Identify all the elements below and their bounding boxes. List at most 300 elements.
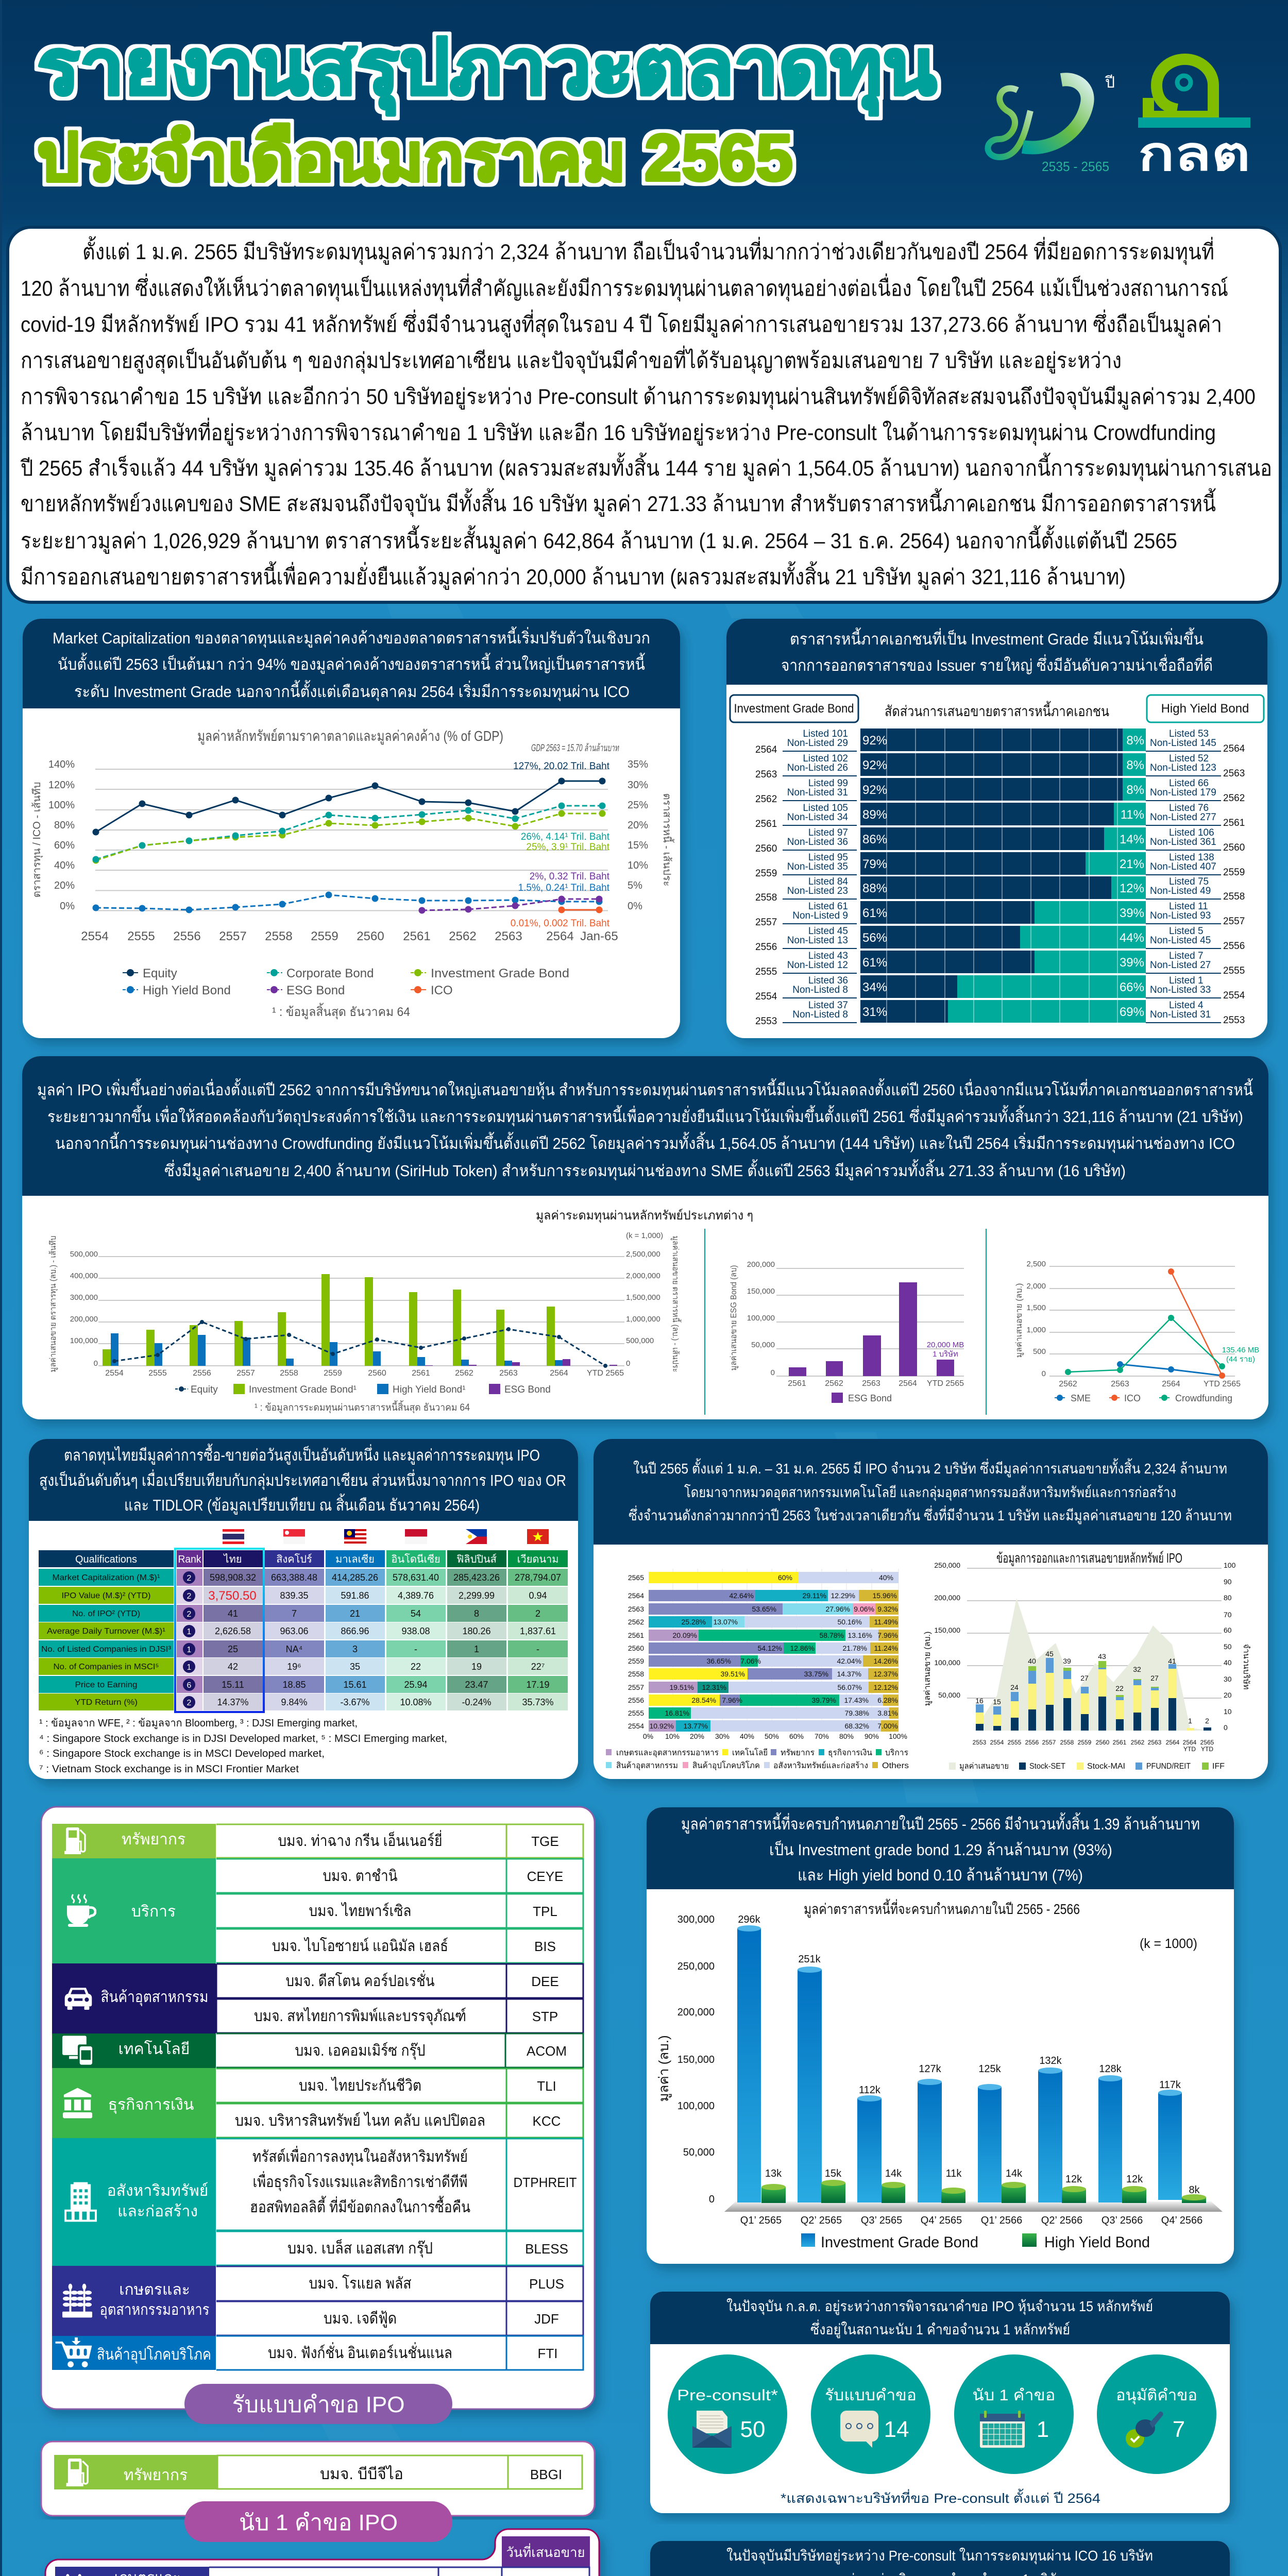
- legend: ICO: [431, 984, 453, 997]
- footnotes: ⁴ : Singapore Stock exchange is in DJSI Developed market, ⁵ : MSCI Emerging market,: [39, 1733, 447, 1744]
- stacked share bars: 56%: [862, 931, 887, 945]
- company names: บมจ. ไทยพาร์เซิล: [309, 1902, 411, 1920]
- combo chart: IPO count and value: 80: [1224, 1594, 1232, 1602]
- panel: private bond issuance split: [726, 619, 1267, 1038]
- line chart: % of GDP: 2557: [219, 929, 247, 943]
- stacked bar chart: IPO by industry: 39.51%: [721, 1670, 745, 1678]
- panel: IPO issuance: [594, 1439, 1268, 1779]
- category column: [52, 1824, 216, 2370]
- line chart: SME, ICO, crowdfunding: Crowdfunding: [1175, 1393, 1232, 1403]
- combo chart: IPO count and value: 10: [1224, 1707, 1232, 1716]
- IPO legend: PFUND/REIT: [1146, 1762, 1191, 1771]
- bar chart legend: ESG Bond: [504, 1384, 551, 1395]
- ASEAN table rows: IPO Value (M.$)² (YTD): [62, 1591, 150, 1600]
- combo chart: IPO count and value: 40: [1224, 1658, 1232, 1667]
- combo chart: IPO count and value: 27: [1150, 1674, 1159, 1682]
- ASEAN table rows: 54: [411, 1608, 421, 1619]
- maturity legend: [801, 2233, 1150, 2251]
- stacked share bars: 2559: [755, 868, 777, 879]
- bar chart: ESG bond: 2561: [788, 1379, 806, 1388]
- combo chart: IPO count and value: 32: [1133, 1665, 1141, 1673]
- bar chart: maturing bonds: 12k: [1126, 2174, 1143, 2185]
- combo chart: IPO count and value: 200,000: [934, 1594, 960, 1602]
- legend box: investment grade: Investment Grade Bond: [734, 702, 854, 716]
- stacked share bars: Listed 95: [808, 852, 848, 863]
- stacked share bars: 61%: [862, 906, 887, 920]
- stacked bar chart: IPO by industry: 53.65%: [752, 1605, 776, 1613]
- stacked share bars: 39%: [1120, 956, 1144, 970]
- stacked share bars: 8%: [1126, 734, 1144, 748]
- combo chart: IPO count and value: 100,000: [934, 1658, 960, 1667]
- line chart: % of GDP: 80%: [54, 820, 75, 831]
- line chart: % of GDP: 40%: [54, 860, 75, 871]
- stacked bar chart: IPO by industry: 11.24%: [874, 1644, 898, 1652]
- combo chart: IPO count and value: 2564: [1183, 1739, 1197, 1746]
- ASEAN table rows: 2: [187, 1574, 192, 1583]
- panel header: เป็น Investment grade bond 1.29 ล้านล้านบาท (93%): [769, 1840, 1112, 1859]
- stacked share bars: 2556: [755, 942, 777, 953]
- panel header: มูลค่าตราสารหนี้ที่จะครบกำหนดภายในปี 2565 - 2566 มีจำนวนทั้งสิ้น 1.39 ล้านล้านบาท: [681, 1812, 1200, 1834]
- stacked share bars: 2553: [755, 1016, 777, 1027]
- ASEAN table rows: 23.47: [465, 1680, 488, 1690]
- stacked bar chart: IPO by industry: 28.54%: [692, 1696, 716, 1704]
- bar chart: maturing bonds: 127k: [919, 2063, 942, 2075]
- line chart: % of GDP: 120%: [48, 779, 75, 791]
- panel header: [594, 1439, 1268, 1545]
- bar chart: equity and bonds: 2555: [148, 1369, 167, 1378]
- combo chart: IPO count and value: 2562: [1131, 1739, 1145, 1746]
- stacked bar chart: IPO by industry: 9.32%: [877, 1605, 898, 1613]
- industry legend: สินค้าอุตสาหกรรม: [616, 1761, 678, 1771]
- stacked bar chart: IPO by industry: 0%: [643, 1732, 653, 1740]
- bar chart: equity and bonds: 2559: [324, 1369, 342, 1378]
- category column: ธุรกิจการเงิน: [108, 2096, 194, 2114]
- stacked share bars: 2556: [1223, 941, 1245, 952]
- combo chart: IPO count and value: 50: [1224, 1642, 1232, 1651]
- stacked share bars: 66%: [1120, 980, 1144, 994]
- stacked bar chart: IPO by industry: 7.96%: [722, 1696, 742, 1704]
- stacked share bars: Listed 1: [1169, 975, 1204, 986]
- combo chart: IPO count and value: มูลค่าเสนอขาย (ลบ.): [923, 1632, 933, 1706]
- bar chart: ESG bond: 150,000: [747, 1287, 775, 1296]
- combo chart: IPO count and value: จำนวนบริษัท: [1242, 1643, 1250, 1690]
- bar chart: maturing bonds: 0: [709, 2194, 715, 2205]
- stacked bar chart: IPO by industry: 9.06%: [854, 1605, 874, 1613]
- stacked share bars: Listed 105: [803, 803, 848, 814]
- ASEAN table rows: -: [536, 1644, 539, 1654]
- line chart: % of GDP: 2560: [357, 929, 384, 943]
- stacked share bars: Non-Listed 277: [1150, 812, 1216, 823]
- combo chart: IPO count and value: 0: [1224, 1723, 1228, 1732]
- company names: บมจ. ตาชำนิ: [323, 1868, 398, 1885]
- tickers: ACOM: [527, 2043, 567, 2059]
- industry legend: เทคโนโลยี: [732, 1748, 768, 1757]
- stacked bar chart: IPO by industry: 29.11%: [803, 1591, 826, 1600]
- stat: received: รับแบบคำขอ: [825, 2387, 917, 2404]
- stacked bar chart: IPO by industry: 68.32%: [845, 1722, 869, 1730]
- combo chart: IPO count and value: 39: [1063, 1657, 1071, 1665]
- stacked share bars: 86%: [862, 833, 887, 846]
- pill: one filing returned: [184, 2501, 452, 2542]
- stacked share bars: 2561: [1223, 818, 1245, 828]
- company names: บมจ. เอคอมเมิร์ซ กรุ๊ป: [295, 2042, 426, 2060]
- stat: pre-consult: [668, 2354, 787, 2474]
- bar chart: maturing bonds: Q4’ 2565: [921, 2215, 962, 2226]
- bar chart: ESG bond: 0: [771, 1368, 775, 1377]
- bar chart: maturing bonds: 251k: [798, 1954, 821, 1965]
- stacked share bars: Non-Listed 93: [1150, 910, 1211, 921]
- combo chart: IPO count and value: ข้อมูลการออกและการเสนอขายหลักทรัพย์ IPO: [996, 1550, 1182, 1566]
- ASEAN table rows: No. of Listed Companies in DJSI³: [41, 1645, 172, 1654]
- stacked bar chart: IPO by industry: 2554: [628, 1722, 644, 1730]
- industry legend: [606, 1748, 909, 1771]
- ASEAN table rows: YTD Return (%): [75, 1698, 138, 1707]
- stacked share bars: 2554: [755, 991, 777, 1002]
- stacked share bars: 31%: [862, 1005, 887, 1019]
- ASEAN table rows: 663,388.48: [271, 1572, 317, 1583]
- stacked bar chart: IPO by industry: 60%: [778, 1573, 792, 1582]
- stacked share bars: 79%: [862, 857, 887, 871]
- panel header: ในปัจจุบันมีบริษัทอยู่ระหว่าง Pre-consult ในการระดมทุนผ่าน ICO 16 บริษัท: [726, 2547, 1153, 2565]
- stat: approved: อนุมัติคำขอ: [1116, 2387, 1197, 2405]
- stacked bar chart: IPO by industry: 12.29%: [831, 1591, 855, 1600]
- ASEAN table rows: 2: [187, 1610, 192, 1619]
- combo chart: IPO count and value: 2561: [1113, 1739, 1127, 1746]
- stacked share bars: Non-Listed 31: [787, 787, 848, 798]
- stat: pre-consult: 50: [740, 2417, 765, 2442]
- stacked share bars: Non-Listed 26: [787, 762, 848, 773]
- tickers: DTPHREIT: [513, 2175, 577, 2190]
- ASEAN table header: มาเลเซีย: [335, 1554, 375, 1565]
- company names: บมจ. โรแยล พลัส: [309, 2274, 411, 2292]
- bar chart: maturing bonds: 13k: [765, 2168, 782, 2179]
- stacked share bars: Listed 138: [1169, 852, 1214, 863]
- stacked bar chart: IPO by industry: 7.06%: [740, 1657, 761, 1665]
- stacked share bars: Non-Listed 49: [1150, 886, 1211, 896]
- tickers: KCC: [533, 2113, 561, 2129]
- bar chart: maturing bonds: 8k: [1189, 2184, 1200, 2196]
- bar chart: ESG bond: 20,000 MB: [927, 1341, 964, 1349]
- line chart: % of GDP: 2563: [495, 929, 522, 943]
- stacked share bars: Listed 101: [803, 728, 848, 739]
- stacked share bars: Non-Listed 13: [787, 935, 848, 946]
- ASEAN table rows: 3: [352, 1644, 358, 1654]
- stacked share bars: Non-Listed 407: [1150, 861, 1216, 872]
- ASEAN table rows: 2: [535, 1608, 540, 1619]
- stacked share bars: 2559: [1223, 867, 1245, 878]
- ASEAN table rows: 18.85: [282, 1680, 306, 1690]
- category column: เทคโนโลยี: [118, 2040, 190, 2058]
- bar chart: equity and bonds: 2561: [412, 1369, 430, 1378]
- stacked bar chart: IPO by industry: 39.79%: [812, 1696, 836, 1704]
- line chart: % of GDP: GDP 2563 = 15.70 ล้านล้านบาท: [531, 743, 619, 754]
- stacked bar chart: IPO by industry: 11.49%: [874, 1618, 898, 1626]
- ASEAN table rows: 285,423.26: [453, 1572, 500, 1583]
- stacked share bars: Non-Listed 34: [787, 812, 848, 823]
- ASEAN table rows: -0.24%: [462, 1697, 492, 1707]
- stacked bar chart: IPO by industry: 33.75%: [804, 1670, 828, 1678]
- ASEAN table rows: 7: [292, 1608, 297, 1619]
- line chart: SME, ICO, crowdfunding: ICO: [1124, 1393, 1141, 1403]
- stacked bar chart: IPO by industry: 7.00%: [877, 1722, 898, 1730]
- company names: บมจ. ไบโอซายน์ แอนิมัล เฮลธ์: [272, 1937, 448, 1955]
- combo chart: IPO count and value: 2564: [1166, 1739, 1180, 1746]
- bar chart: maturing bonds: 50,000: [683, 2147, 715, 2158]
- ASEAN table rows: 180.26: [462, 1626, 491, 1636]
- stacked bar chart: IPO by industry: 60%: [789, 1732, 804, 1740]
- ASEAN table rows: 22: [411, 1662, 421, 1672]
- combo chart: IPO count and value: 45: [1045, 1650, 1054, 1658]
- combo chart: IPO count and value: 150,000: [934, 1626, 960, 1634]
- stacked share bars: 92%: [862, 783, 887, 797]
- panel header: ซึ่งอยู่ในสถานะนับ 1 คำขอจำนวน 1 หลักทรัพย์: [810, 2319, 1070, 2338]
- legend box: investment grade: [730, 695, 858, 722]
- ASEAN table rows: 2,626.58: [215, 1626, 251, 1636]
- tickers: TLI: [537, 2078, 556, 2094]
- ASEAN table rows: 8: [474, 1608, 479, 1619]
- ASEAN table rows: 866.96: [341, 1626, 369, 1636]
- stacked bar chart: IPO by industry: 70%: [815, 1732, 829, 1740]
- stacked bar chart: IPO by industry: 2560: [628, 1644, 644, 1652]
- legend: Investment Grade Bond: [431, 967, 569, 980]
- ASEAN table rows: 2,299.99: [459, 1590, 495, 1601]
- stacked bar chart: IPO by industry: 50.16%: [838, 1618, 862, 1626]
- legend: Corporate Bond: [286, 967, 374, 980]
- line chart: % of GDP: 30%: [628, 779, 648, 791]
- company names: บมจ. ไทยประกันชีวิต: [299, 2076, 421, 2094]
- IPO legend: IFF: [1212, 1762, 1225, 1771]
- bar chart: equity and bonds: 300,000: [70, 1293, 98, 1302]
- bar chart: maturing bonds: 300,000: [677, 1914, 715, 1925]
- stacked share bars: 89%: [862, 808, 887, 822]
- note: *แสดงเฉพาะบริษัทที่ขอ Pre-consult ตั้งแต่ ปี 2564: [781, 2488, 1100, 2506]
- combo chart: IPO count and value: 2558: [1060, 1739, 1074, 1746]
- company names: ทรัสต์เพื่อการลงทุนในอสังหาริมทรัพย์: [252, 2146, 468, 2166]
- stacked share bars: Listed 43: [808, 951, 848, 961]
- tickers: PLUS: [529, 2276, 564, 2292]
- bar chart: equity and bonds: มูลค่าเสนอขาย ตราสารทุน (ลบ.) - เส้นทึบ: [48, 1235, 58, 1372]
- ASEAN table rows: -3.67%: [340, 1697, 370, 1707]
- ASEAN table header: เวียดนาม: [517, 1554, 558, 1565]
- company names: [235, 1830, 485, 2362]
- line chart: % of GDP: 10%: [628, 860, 648, 871]
- line chart: SME, ICO, crowdfunding: 2,000: [1026, 1282, 1046, 1291]
- stacked bar chart: IPO by industry: 2562: [628, 1618, 644, 1626]
- tickers: FTI: [538, 2346, 557, 2361]
- logo: 30 years: ปี: [1105, 74, 1115, 91]
- stacked share bars: 2558: [755, 892, 777, 903]
- bar chart: equity and bonds: 2,500,000: [626, 1250, 660, 1259]
- stacked share bars: Non-Listed 23: [787, 886, 848, 896]
- stacked share bars: 8%: [1126, 758, 1144, 772]
- legend: [123, 967, 569, 1020]
- ASEAN table rows: 9.84%: [281, 1697, 308, 1707]
- stacked share bars: 88%: [862, 882, 887, 895]
- stacked bar chart: IPO by industry: 25.28%: [682, 1618, 706, 1626]
- combo chart: IPO count and value: 15: [993, 1698, 1001, 1706]
- logo: SEC: กลต: [1138, 128, 1250, 180]
- stacked bar chart: IPO by industry: 10.92%: [650, 1722, 674, 1730]
- panel: ICO pipeline: [650, 2541, 1230, 2576]
- stacked bar chart: IPO by industry: 2565: [628, 1573, 644, 1582]
- bar chart: maturing bonds: (k = 1000): [1140, 1936, 1197, 1951]
- pill: one filing returned: นับ 1 คำขอ IPO: [239, 2510, 398, 2535]
- bar chart: ESG bond: 50,000: [751, 1341, 775, 1349]
- ASEAN table rows: 591.86: [341, 1590, 369, 1601]
- legend: ¹ : ข้อมูลสิ้นสุด ธันวาคม 64: [272, 1003, 410, 1020]
- stacked bar chart: IPO by industry: 13.07%: [714, 1618, 738, 1626]
- combo chart: IPO count and value: 100: [1224, 1561, 1236, 1569]
- company names: ฮอสพิทอลลิตี้ ที่มีข้อตกลงในการซื้อคืน: [250, 2196, 470, 2216]
- ASEAN table header: Rank: [178, 1554, 201, 1565]
- logo: 30 years: [988, 74, 1115, 174]
- bar chart: maturing bonds: 14k: [885, 2168, 902, 2179]
- ASEAN table header: ไทย: [223, 1553, 242, 1565]
- panel header: จากการออกตราสารของ Issuer รายใหญ่ ซึ่งมีอันดับความน่าเชื่อถือที่ดี: [781, 654, 1213, 674]
- bar chart: equity and bonds: [48, 1231, 682, 1414]
- stacked bar chart: IPO by industry: 42.64%: [730, 1591, 754, 1600]
- stacked bar chart: IPO by industry: 79.38%: [845, 1709, 869, 1717]
- bar chart: maturing bonds: Q4’ 2566: [1161, 2215, 1202, 2226]
- chart heading: สัดส่วนการเสนอขายตราสารหนี้ภาคเอกชน: [885, 701, 1109, 719]
- footnotes: ¹ : ข้อมูลจาก WFE, ² : ข้อมูลจาก Bloomberg, ³ : DJSI Emerging market,: [39, 1718, 358, 1730]
- category column: สินค้าอุตสาหกรรม: [101, 1989, 208, 2007]
- panel: approved IPO filings: [45, 2529, 599, 2576]
- line chart: SME, ICO, crowdfunding: 2562: [1059, 1380, 1077, 1388]
- stacked share bars: 92%: [862, 758, 887, 772]
- ASEAN table rows: 15.61: [343, 1680, 367, 1690]
- line chart: SME, ICO, crowdfunding: SME: [1071, 1393, 1091, 1403]
- industry legend: Others: [882, 1761, 909, 1770]
- bar chart: maturing bonds: 200,000: [677, 2007, 715, 2018]
- stacked bar chart: IPO by industry: 80%: [839, 1732, 854, 1740]
- line chart: % of GDP: 2564: [546, 929, 574, 943]
- stacked bar chart: IPO by industry: 6.28%: [877, 1696, 898, 1704]
- ASEAN table rows: 42: [228, 1662, 238, 1672]
- bar chart: equity and bonds: 0: [626, 1359, 630, 1368]
- stacked share bars: 2562: [755, 794, 777, 805]
- stacked share bars: 2564: [755, 744, 777, 755]
- stat: approved: 7: [1173, 2417, 1185, 2442]
- stacked bar chart: IPO by industry: 42.04%: [837, 1657, 861, 1665]
- combo chart: IPO count and value: YTD: [1201, 1745, 1213, 1753]
- ASEAN table rows: 35: [350, 1662, 360, 1672]
- industry legend: เกษตรและอุตสาหกรรมอาหาร: [616, 1749, 719, 1758]
- stacked share bars: Non-Listed 145: [1150, 738, 1216, 749]
- combo chart: IPO count and value: 2559: [1078, 1739, 1092, 1746]
- ASEAN table rows: 15.11: [222, 1680, 244, 1690]
- stacked bar chart: IPO by industry: 30%: [715, 1732, 730, 1740]
- stacked bar chart: IPO by industry: 13.16%: [848, 1631, 872, 1639]
- panel: one filing returned: บมจ. บีบีจีไอ: [320, 2465, 403, 2483]
- stat: counted: 1: [1037, 2417, 1049, 2442]
- company names: บมจ. เจดีฟู้ด: [324, 2310, 397, 2328]
- bar chart: equity and bonds: 500,000: [626, 1336, 654, 1345]
- bar chart: equity and bonds: 0: [94, 1359, 98, 1368]
- bar chart: maturing bonds: Q2’ 2566: [1041, 2215, 1082, 2226]
- bar chart: maturing bonds: Q3’ 2566: [1101, 2215, 1143, 2226]
- line chart: SME, ICO, crowdfunding: 500: [1033, 1347, 1046, 1356]
- combo chart: IPO count and value: 40: [1028, 1657, 1036, 1665]
- line chart: SME, ICO, crowdfunding: มูลค่าเสนอขาย (ลบ.): [1015, 1283, 1024, 1358]
- ASEAN table rows: [39, 1569, 568, 1710]
- ASEAN table rows: 938.08: [401, 1626, 430, 1636]
- category column: [55, 2567, 209, 2576]
- line chart: % of GDP: 0%: [60, 901, 75, 912]
- combo chart: IPO count and value: 22: [1115, 1684, 1124, 1692]
- stacked share bars: 2553: [1223, 1015, 1245, 1026]
- bar chart: maturing bonds: 112k: [859, 2084, 881, 2096]
- stacked share bars: Listed 75: [1169, 876, 1209, 887]
- line chart: % of GDP: 60%: [54, 840, 75, 851]
- combo chart: IPO count and value: 41: [1168, 1657, 1176, 1665]
- line chart: % of GDP: 25%, 3.9¹ Tril. Baht: [526, 842, 610, 853]
- panel header: ตลาดทุนไทยมีมูลค่าการซื้อ-ขายต่อวันสูงเป็นอันดับหนึ่ง และมูลค่าการระดมทุน IPO: [64, 1444, 540, 1465]
- stacked share bars: 2562: [1223, 793, 1245, 804]
- ASEAN table header: [39, 1550, 568, 1567]
- stacked bar chart: IPO by industry: 21.78%: [843, 1644, 867, 1652]
- footnotes: ⁷ : Vietnam Stock exchange is in MSCI Frontier Market: [39, 1764, 299, 1775]
- line chart: % of GDP: 2555: [127, 929, 155, 943]
- bar chart: maturing bonds: Q1’ 2565: [740, 2215, 782, 2226]
- tickers: CEYE: [527, 1869, 563, 1884]
- stacked share bars: 92%: [862, 734, 887, 748]
- panel header: [726, 619, 1267, 685]
- IPO legend: Stock-SET: [1029, 1762, 1065, 1771]
- bar chart: equity and bonds: 200,000: [70, 1315, 98, 1324]
- stacked bar chart: IPO by industry: 20%: [690, 1732, 704, 1740]
- stacked share bars: Listed 61: [808, 901, 848, 912]
- line chart: % of GDP: 20%: [54, 880, 75, 891]
- panel header: และ TIDLOR (ข้อมูลเปรียบเทียบ ณ สิ้นเดือน ธันวาคม 2564): [124, 1494, 480, 1515]
- ASEAN table rows: 2: [187, 1699, 192, 1707]
- stacked bar chart: IPO by industry: 3.81%: [877, 1709, 898, 1717]
- bar chart: maturing bonds: 250,000: [677, 1961, 715, 1972]
- panel header: สูงเป็นอันดับต้นๆ เมื่อเปรียบเทียบกับกลุ่มประเทศอาเซียน ส่วนหนึ่งมาจากการ IPO ของ OR: [39, 1469, 566, 1490]
- ASEAN table rows: 41: [228, 1608, 238, 1619]
- stacked bar chart: IPO by industry: 19.51%: [670, 1683, 694, 1691]
- stacked bar chart: IPO by industry: 10%: [665, 1732, 680, 1740]
- company names: เพื่อธุรกิจโรงแรมและสิทธิการเช่าดีทีพี: [252, 2171, 468, 2192]
- stacked bar chart: IPO by industry: 2559: [628, 1657, 644, 1665]
- stacked share bars: 2557: [1223, 916, 1245, 927]
- combo chart: IPO count and value: 2560: [1096, 1739, 1110, 1746]
- stacked share bars: Non-Listed 31: [1150, 1009, 1211, 1020]
- panel header: ตราสารหนี้ภาคเอกชนที่เป็น Investment Grade มีแนวโน้มเพิ่มขึ้น: [790, 628, 1204, 648]
- title: [37, 24, 937, 195]
- panel: market capitalization: [23, 619, 680, 1038]
- stacked share bars: Listed 84: [808, 876, 848, 887]
- bar chart legend: Equity: [191, 1384, 218, 1395]
- stacked share bars: Listed 4: [1169, 1000, 1204, 1011]
- stacked share bars: Non-Listed 9: [792, 910, 848, 921]
- stacked share bars: Non-Listed 27: [1150, 960, 1211, 971]
- stacked bar chart: IPO by industry: 14.37%: [837, 1670, 861, 1678]
- combo chart: IPO count and value: 2556: [1025, 1739, 1039, 1746]
- line chart: % of GDP: 2%, 0.32 Tril. Baht: [530, 871, 610, 882]
- stacked bar chart: IPO by industry: 2558: [628, 1670, 644, 1678]
- stacked share bars: 11%: [1121, 808, 1144, 822]
- IPO legend: [949, 1762, 1225, 1771]
- line chart: % of GDP: ตราสารทุน / ICO - เส้นทึบ: [31, 782, 43, 897]
- company names: บมจ. สหไทยการพิมพ์และบรรจุภัณฑ์: [254, 2007, 466, 2026]
- bar chart: equity and bonds: มูลค่าเสนอขาย ตราสารหนี้ (ลบ.) - เส้นประ: [670, 1235, 682, 1372]
- ASEAN table rows: 414,285.26: [332, 1572, 378, 1583]
- combo chart: IPO count and value: 50,000: [938, 1691, 960, 1699]
- panel: IPO filings received: [41, 1807, 595, 2409]
- bar chart: maturing bonds: 150,000: [677, 2054, 715, 2065]
- ASEAN table rows: 35.73%: [522, 1697, 554, 1707]
